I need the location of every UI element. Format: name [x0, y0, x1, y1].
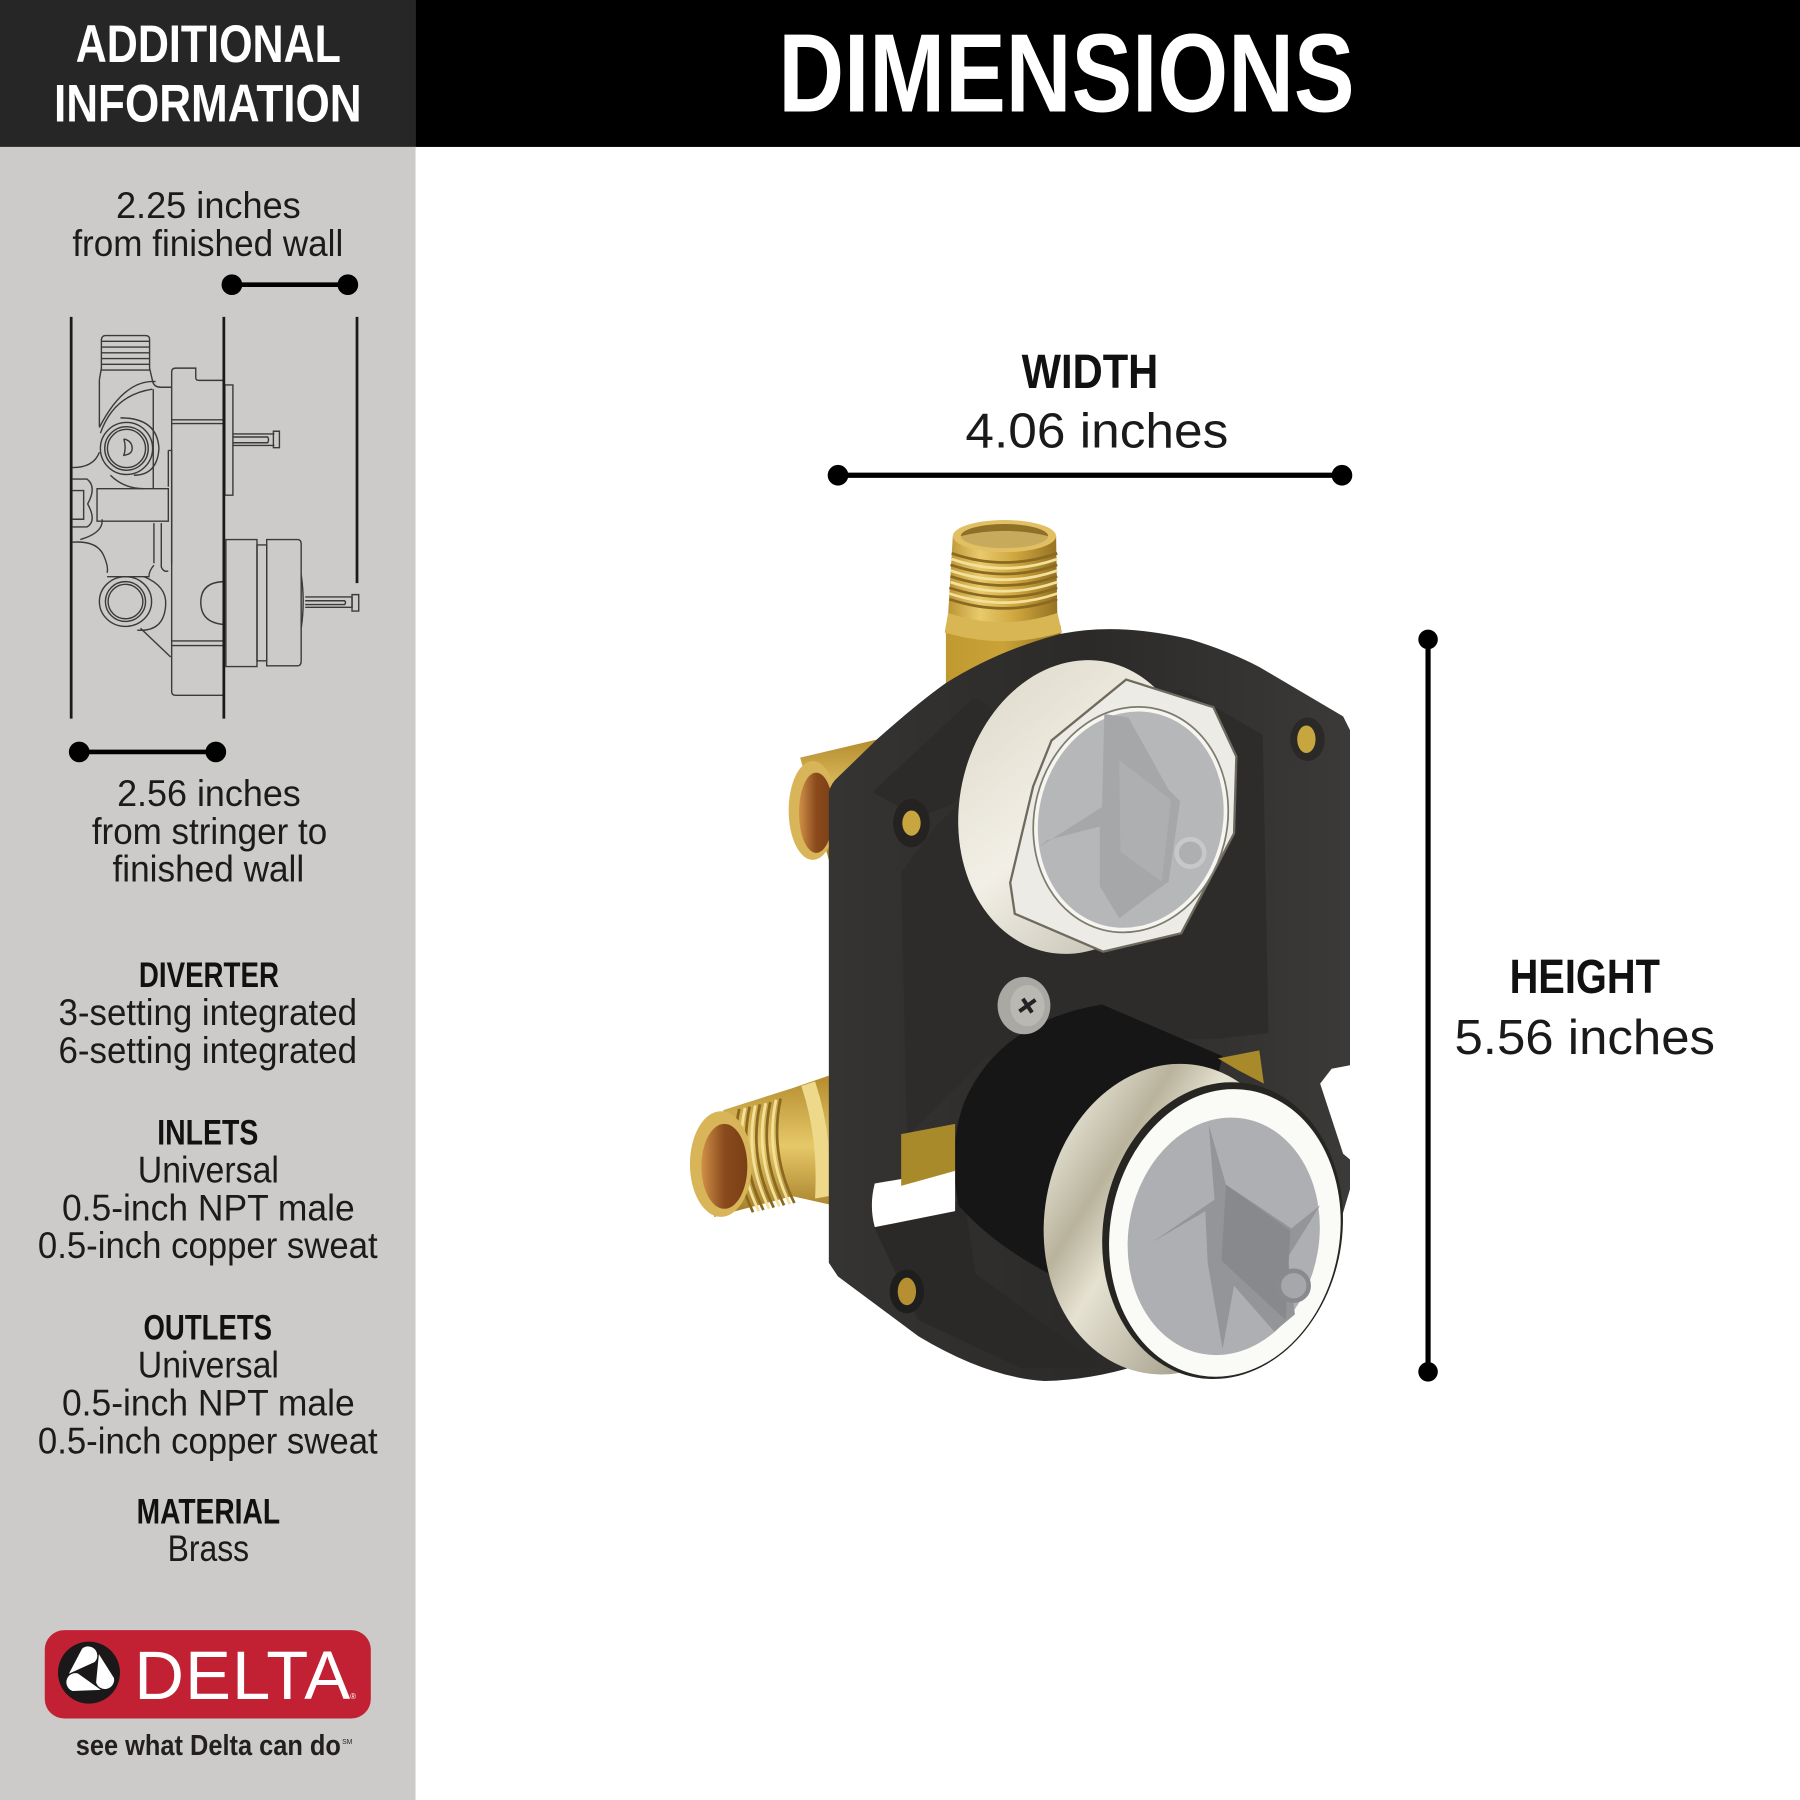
spec: diverter: 6-setting integrated — [59, 1030, 357, 1071]
spec: inlets — [38, 1113, 378, 1266]
height label: HEIGHT — [1510, 950, 1660, 1004]
spec: outlets — [38, 1308, 378, 1461]
header bar: dimensions — [416, 0, 1800, 147]
spec: material: Brass — [168, 1528, 249, 1569]
top brass nipple — [945, 520, 1062, 700]
spec: inlets: 0.5-inch NPT male — [62, 1187, 355, 1228]
screw — [998, 977, 1050, 1034]
logo: delta: SM — [342, 1739, 353, 1746]
text: stringer to finished wall: from stringer to — [92, 811, 327, 852]
logo: delta — [45, 1630, 371, 1762]
width label: WIDTH — [1022, 345, 1158, 399]
text: stringer to finished wall: finished wall — [113, 849, 304, 890]
spec: diverter: 3-setting integrated — [59, 992, 357, 1033]
upper ring — [931, 638, 1252, 976]
central dark blob — [954, 1004, 1223, 1366]
side view technical drawing — [73, 336, 359, 695]
mounting holes — [890, 717, 1325, 1313]
height label — [1454, 950, 1715, 1065]
height label: 5.56 inches — [1454, 1010, 1715, 1065]
logo: delta: see what Delta can do — [76, 1730, 341, 1762]
spec: inlets: INLETS — [157, 1113, 258, 1153]
header: additional information — [0, 0, 416, 147]
text: stringer to finished wall — [92, 773, 327, 890]
lower ring — [1019, 1043, 1366, 1398]
spec: outlets: OUTLETS — [143, 1308, 272, 1348]
plate shoulder band — [872, 698, 1010, 817]
mounting plate — [829, 629, 1350, 1381]
panel: additional information — [0, 147, 416, 1800]
lower left threaded inlet — [690, 1076, 833, 1217]
header: additional information: INFORMATION — [54, 75, 362, 134]
spec: outlets: 0.5-inch NPT male — [62, 1382, 355, 1423]
logo: delta: DELTA — [134, 1637, 350, 1714]
spec: diverter — [59, 955, 357, 1071]
header: additional information: ADDITIONAL — [76, 15, 341, 74]
diagram wall lines — [71, 317, 357, 719]
logo: delta: ® — [350, 1692, 356, 1701]
text: stringer to finished wall: 2.56 inches — [117, 773, 301, 814]
width label — [965, 345, 1228, 459]
dimension marker: finished wall depth — [222, 275, 358, 294]
spec: inlets: 0.5-inch copper sweat — [38, 1225, 378, 1266]
spec: inlets: Universal — [138, 1149, 279, 1190]
width label: 4.06 inches — [965, 404, 1228, 459]
spec: diverter: DIVERTER — [139, 955, 279, 995]
product photo: valve body — [690, 520, 1366, 1398]
spec: outlets: 0.5-inch copper sweat — [38, 1420, 378, 1461]
spec: outlets: Universal — [138, 1345, 279, 1386]
height dimension line — [1419, 630, 1437, 1381]
spec: material — [137, 1491, 280, 1569]
width dimension line — [828, 465, 1352, 485]
text: depth from finished wall — [72, 185, 343, 264]
text: depth from finished wall: from finished wall — [72, 223, 343, 264]
upper left copper outlet — [789, 739, 878, 860]
plate window and brass pipe — [872, 1050, 1264, 1227]
dimension marker: stringer to finished wall — [69, 742, 226, 762]
spec: material: MATERIAL — [137, 1491, 280, 1531]
plate inner recess — [901, 689, 1268, 1136]
title: dimensions: DIMENSIONS — [778, 10, 1355, 135]
text: depth from finished wall: 2.25 inches — [116, 185, 301, 226]
